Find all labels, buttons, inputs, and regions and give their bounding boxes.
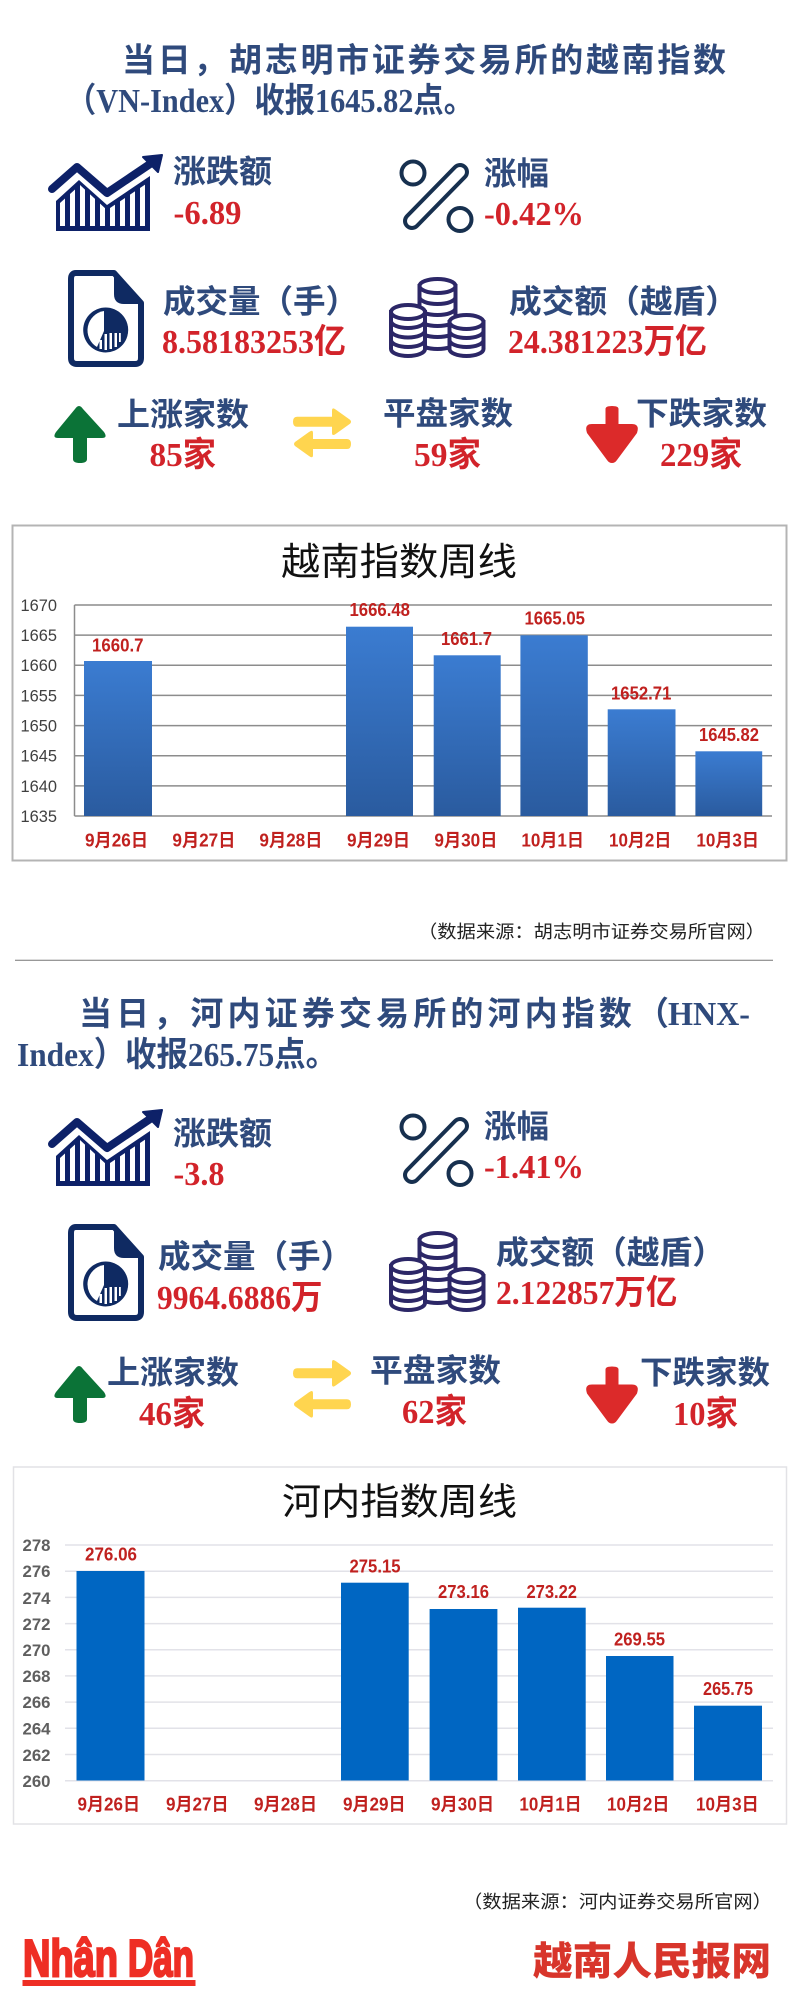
icon: coin stacks	[391, 279, 484, 356]
icon: document with pie	[71, 272, 143, 364]
stat: change amount: -6.89	[174, 195, 242, 232]
stat: advancers: 85家	[150, 436, 216, 474]
value labels: 275.15	[350, 1557, 400, 1577]
stat: change percent	[484, 1102, 584, 1186]
stat: turnover: 成交额（越盾）	[496, 1228, 725, 1274]
stat: volume: 成交量（手）	[158, 1232, 353, 1278]
icon: trend chart	[52, 155, 162, 231]
chart title: 越南指数周线	[281, 531, 517, 586]
icon: green up arrow	[54, 1366, 106, 1423]
stat: change amount: 涨跌额	[173, 146, 272, 192]
y axis labels: 276	[22, 1562, 50, 1581]
y axis labels: 260	[22, 1772, 50, 1791]
stat: change amount: -3.8	[174, 1156, 224, 1193]
stat: turnover: 2.122857万亿	[496, 1274, 678, 1312]
source note: VN-Index: （数据来源：胡志明市证券交易所官网）	[418, 918, 765, 944]
value labels: 1665.05	[524, 609, 585, 629]
icon: red down arrow	[586, 406, 638, 463]
date labels: 9月29日	[347, 831, 410, 851]
icon: yellow swap arrows	[293, 408, 351, 457]
icon: percent	[402, 1116, 472, 1185]
y axis labels: 278	[22, 1536, 50, 1555]
date labels: 9月30日	[431, 1795, 494, 1815]
y axis labels: 1635	[20, 807, 57, 826]
stat: unchanged: 62家	[402, 1393, 467, 1431]
stat: turnover: 成交额（越盾）	[509, 276, 738, 322]
y axis labels: 1670	[20, 596, 57, 615]
icon: coin stacks	[391, 1233, 484, 1310]
date labels: 9月29日	[343, 1795, 406, 1815]
y axis labels: 264	[22, 1720, 51, 1738]
date labels: 9月26日	[85, 831, 148, 851]
y axis labels: 1660	[20, 656, 57, 675]
stat: volume: 成交量（手）	[163, 276, 358, 322]
stat: volume	[157, 1232, 353, 1317]
stat: decliners: 下跌家数	[640, 1348, 770, 1394]
stat: change percent	[484, 148, 584, 233]
heading: HNX-Index close: 当日，河内证券交易所的河内指数（	[79, 987, 669, 1035]
date labels: 9月27日	[172, 831, 235, 851]
stat: advancers: 上涨家数	[117, 390, 249, 436]
value labels: 1652.71	[611, 683, 671, 703]
value labels: 273.22	[526, 1582, 577, 1602]
y axis labels: 268	[22, 1667, 50, 1686]
stat: unchanged: 平盘家数	[383, 388, 513, 434]
stat: change percent: -1.41%	[484, 1149, 584, 1186]
value labels: 1661.7	[441, 629, 492, 649]
panel: HNX-Index summary	[17, 987, 770, 1433]
stat: change amount: 涨跌额	[173, 1108, 272, 1154]
value labels: 1645.82	[699, 725, 759, 745]
chart title: 河内指数周线	[282, 1472, 517, 1526]
chart: VN-Index weekly	[12, 526, 786, 860]
panel: VN-Index summary	[52, 34, 767, 474]
y axis labels	[22, 1536, 51, 1791]
stat: volume: 8.58183253亿	[162, 323, 346, 361]
date labels: 9月28日	[254, 1795, 317, 1815]
stat: advancers: 上涨家数	[107, 1348, 239, 1394]
heading: HNX-Index close: HNX-	[668, 996, 750, 1033]
heading: VN-Index close	[66, 34, 726, 120]
y axis labels: 1665	[20, 626, 57, 645]
icon: percent	[402, 162, 472, 231]
logo: Nhan Dan: Nhân	[23, 1930, 118, 1988]
date labels: 10月1日	[521, 831, 584, 851]
heading: VN-Index close: （VN-Index）收报1645.82点。	[66, 82, 474, 120]
stat: change percent: 涨幅	[484, 148, 549, 194]
value labels	[85, 1545, 753, 1699]
date labels	[78, 1795, 759, 1815]
stat: turnover: 24.381223万亿	[508, 323, 707, 361]
stat: decliners	[640, 1348, 770, 1433]
y axis labels: 1650	[20, 716, 57, 736]
date labels: 9月26日	[78, 1795, 140, 1815]
stat: unchanged	[383, 388, 513, 474]
value labels: 276.06	[85, 1545, 137, 1565]
value labels: 265.75	[703, 1679, 753, 1699]
value labels: 273.16	[438, 1582, 489, 1602]
bars	[76, 1571, 762, 1780]
y axis labels: 262	[22, 1746, 50, 1765]
icon: trend chart	[52, 1110, 162, 1186]
y axis labels	[20, 596, 57, 826]
stat: advancers	[117, 390, 249, 474]
icon: red down arrow	[586, 1366, 638, 1424]
date labels: 9月27日	[166, 1795, 229, 1815]
source note: HNX-Index: （数据来源：河内证券交易所官网）	[463, 1888, 772, 1914]
value labels: 269.55	[614, 1630, 665, 1650]
heading: VN-Index close: 当日，胡志明市证券交易所的越南指数	[122, 34, 726, 82]
value labels: 1660.7	[92, 636, 144, 656]
stat: change percent: 涨幅	[484, 1102, 549, 1148]
date labels	[85, 831, 759, 851]
stat: unchanged	[370, 1346, 501, 1431]
bars	[84, 627, 762, 816]
y axis labels: 270	[22, 1641, 50, 1660]
stat: advancers: 46家	[139, 1395, 205, 1433]
date labels: 10月2日	[609, 831, 671, 851]
y axis labels: 272	[22, 1615, 50, 1634]
y axis labels: 1645	[20, 746, 57, 766]
stat: decliners	[636, 388, 767, 474]
stat: turnover	[496, 1228, 725, 1312]
wordmark: Vietnam People's Daily: 越南人民报网	[533, 1931, 771, 1987]
date labels: 9月30日	[434, 831, 497, 851]
stat: turnover	[508, 276, 738, 361]
chart: HNX-Index weekly	[14, 1467, 786, 1824]
stat: change amount	[173, 1108, 272, 1193]
y axis labels: 274	[22, 1589, 51, 1608]
y axis labels: 1640	[20, 777, 57, 796]
stat: change amount	[173, 146, 272, 232]
date labels: 9月28日	[259, 831, 322, 851]
icon: yellow swap arrows	[293, 1360, 351, 1418]
stat: decliners: 229家	[660, 436, 742, 474]
y axis labels: 266	[22, 1693, 50, 1712]
value labels: 1666.48	[350, 600, 410, 620]
date labels: 10月1日	[519, 1795, 582, 1815]
icon: green up arrow	[54, 406, 106, 463]
date labels: 10月2日	[607, 1795, 669, 1815]
date labels: 10月3日	[696, 1795, 759, 1815]
stat: volume	[162, 276, 358, 361]
date labels: 10月3日	[696, 831, 759, 851]
stat: decliners: 10家	[673, 1395, 738, 1433]
stat: unchanged: 59家	[414, 436, 481, 474]
value labels	[92, 600, 759, 745]
stat: decliners: 下跌家数	[636, 388, 767, 434]
stat: advancers	[107, 1348, 239, 1433]
y axis labels: 1655	[20, 686, 57, 706]
heading: HNX-Index close: Index）收报265.75点。	[17, 1036, 337, 1074]
stat: unchanged: 平盘家数	[370, 1346, 501, 1392]
icon: document with pie	[71, 1226, 143, 1318]
heading: HNX-Index close	[17, 987, 750, 1074]
stat: change percent: -0.42%	[484, 196, 584, 233]
stat: volume: 9964.6886万	[157, 1280, 322, 1317]
logo: Nhan Dan: Dân	[128, 1930, 194, 1988]
